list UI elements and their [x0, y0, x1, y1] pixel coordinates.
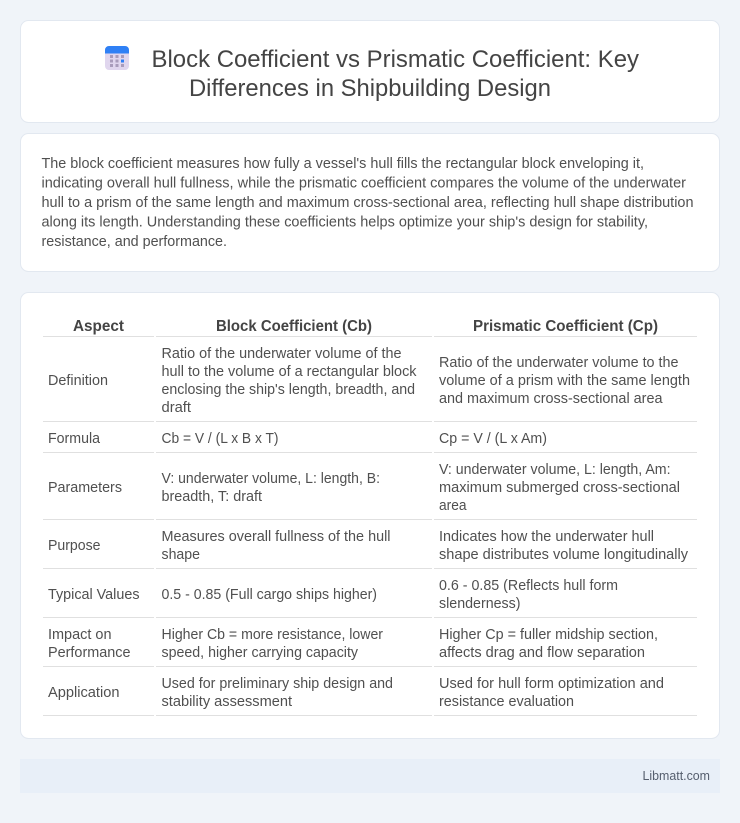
- row: Application: [48, 676, 664, 710]
- row: Purpose: Purpose: [48, 538, 100, 554]
- panel: footer: [20, 759, 720, 793]
- row: Typical Values: slenderness): [439, 596, 520, 612]
- row: Formula: Cb = V / (L x B x T): [162, 431, 278, 447]
- row: Impact on Performance: Higher Cp = fuller midship section,: [439, 627, 658, 643]
- row: Formula: [48, 431, 547, 447]
- title: [152, 46, 640, 102]
- row: Typical Values: 0.6 - 0.85 (Reflects hull form: [439, 578, 618, 594]
- row: Typical Values: 0.5 - 0.85 (Full cargo ships higher): [162, 587, 377, 603]
- panel: comparison table: [20, 292, 720, 738]
- table header row: Prismatic Coefficient (Cp): [473, 318, 658, 335]
- row: Typical Values: Typical Values: [48, 587, 140, 603]
- row: Parameters: V: underwater volume, L: length, B:: [162, 471, 380, 487]
- title: Differences in Shipbuilding Design: [189, 75, 551, 102]
- row: Purpose: [48, 529, 689, 563]
- table header row: [73, 318, 658, 335]
- row: Formula: Cp = V / (L x Am): [439, 431, 547, 447]
- row: Parameters: maximum submerged cross-sectional: [439, 480, 680, 496]
- row: Purpose: shape distributes volume longitudinally: [439, 547, 689, 563]
- row: Typical Values: [48, 578, 618, 612]
- row: Definition: [48, 346, 690, 416]
- intro text block: [42, 156, 694, 250]
- row: Purpose: Measures overall fullness of the hull: [162, 529, 390, 545]
- row: Parameters: breadth, T: draft: [162, 489, 262, 505]
- table header row: Aspect: [73, 318, 124, 335]
- row: Definition: enclosing the ship's length, breadth, and: [162, 382, 415, 398]
- row: Impact on Performance: affects drag and flow separation: [439, 645, 645, 661]
- panel: title card: [20, 20, 720, 122]
- row: Impact on Performance: Impact on: [48, 627, 112, 643]
- intro text block: indicating overall hull fullness, while the prismatic coefficient compares the volume of the underwater: [42, 176, 686, 192]
- row: Definition: and maximum cross-sectional area: [439, 391, 662, 407]
- row: Formula: Formula: [48, 431, 100, 447]
- row: Parameters: [48, 462, 680, 514]
- row: Definition: hull to the volume of a rectangular block: [162, 364, 417, 380]
- footer credit: Libmatt.com: [642, 769, 710, 783]
- row: Impact on Performance: Performance: [48, 645, 130, 661]
- intro text block: resistance, and performance.: [42, 234, 227, 250]
- row: Application: stability assessment: [162, 694, 292, 710]
- row: Application: Used for preliminary ship design and: [162, 676, 393, 692]
- icon: calendar grid: [105, 46, 129, 70]
- row: Parameters: V: underwater volume, L: length, Am:: [439, 462, 670, 478]
- intro text block: The block coefficient measures how fully a vessel's hull fills the rectangular block enveloping it,: [42, 156, 644, 172]
- row: Application: resistance evaluation: [439, 694, 574, 710]
- row: Definition: Ratio of the underwater volume of the: [162, 346, 402, 362]
- row: Parameters: Parameters: [48, 480, 122, 496]
- row: Purpose: shape: [162, 547, 200, 563]
- row: Definition: Ratio of the underwater volume to the: [439, 355, 678, 371]
- row: Definition: draft: [162, 400, 191, 416]
- row: Impact on Performance: speed, higher carrying capacity: [162, 645, 359, 661]
- row: Application: Application: [48, 685, 120, 701]
- intro text block: along its length. Understanding these coefficients helps optimize your ship's design for stability,: [42, 214, 648, 230]
- row: Application: Used for hull form optimization and: [439, 676, 664, 692]
- table header row: Block Coefficient (Cb): [216, 318, 372, 335]
- panel: introduction: [20, 134, 720, 272]
- row: Definition: Definition: [48, 373, 108, 389]
- row: Impact on Performance: [48, 627, 658, 661]
- title: Block Coefficient vs Prismatic Coefficient: Key: [152, 46, 640, 73]
- row: Purpose: Indicates how the underwater hull: [439, 529, 654, 545]
- intro text block: hull to a prism of the same length and maximum cross-sectional area, reflecting hull shape distribution: [42, 195, 694, 211]
- row: Definition: volume of a prism with the same length: [439, 373, 690, 389]
- row: Parameters: area: [439, 498, 466, 514]
- row: Impact on Performance: Higher Cb = more resistance, lower: [162, 627, 383, 643]
